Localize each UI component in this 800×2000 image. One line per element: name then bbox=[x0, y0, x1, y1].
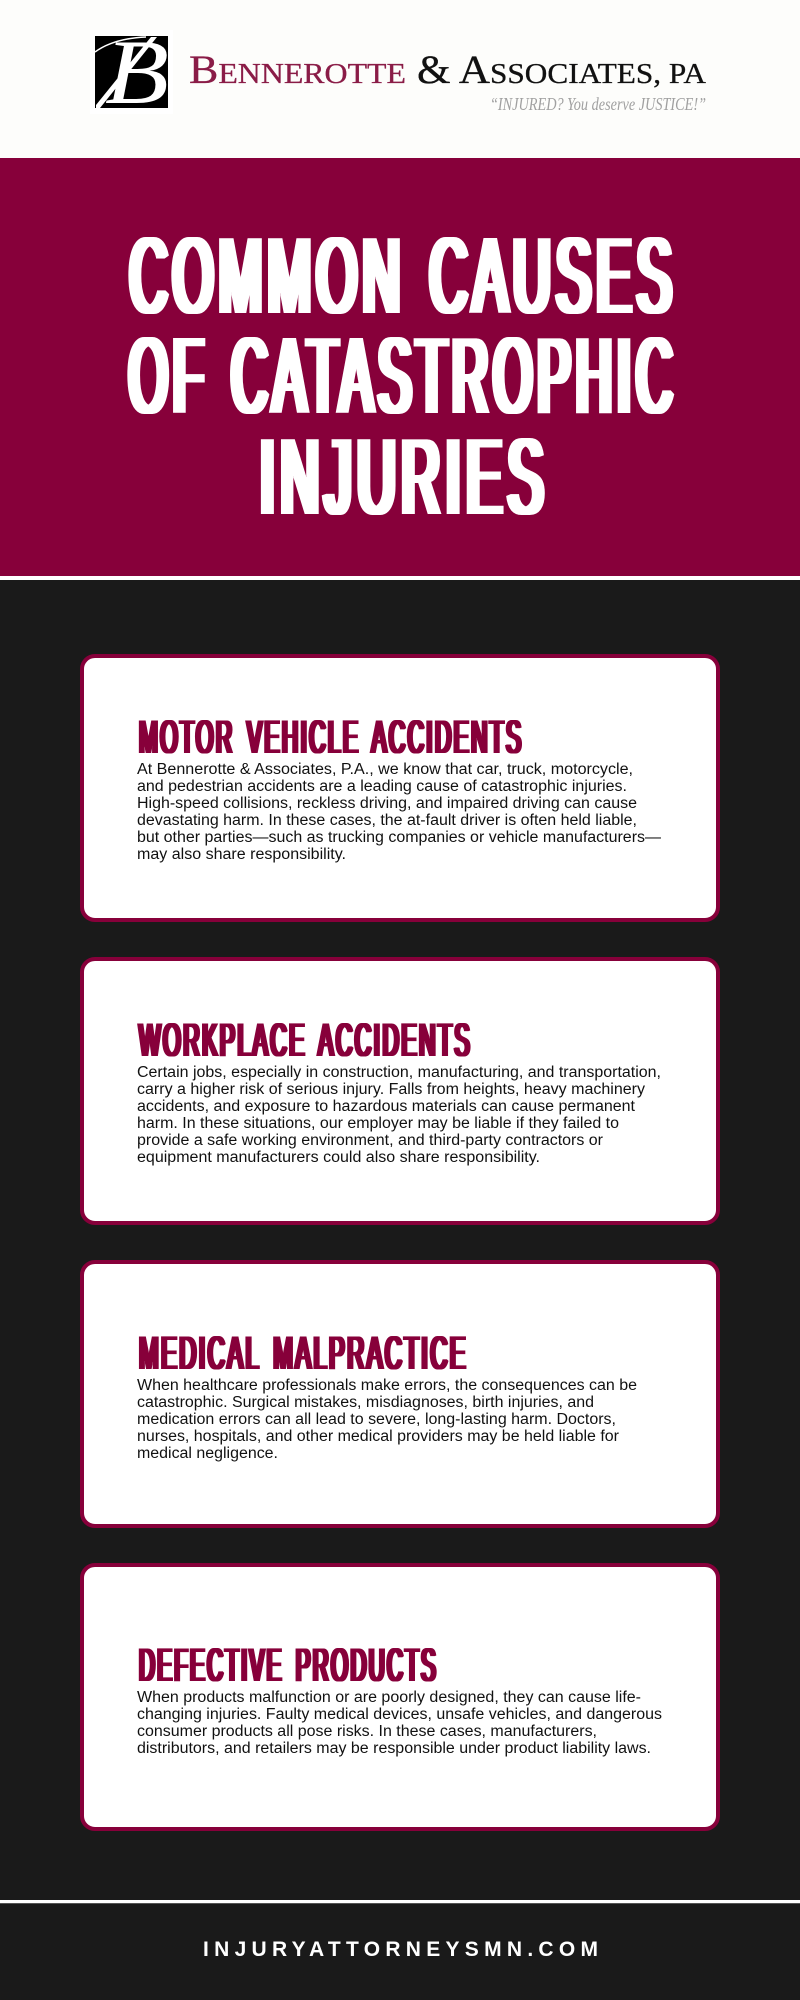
icon: monogram B logo: B bbox=[105, 21, 169, 123]
title text bbox=[129, 215, 678, 538]
logo wordmark: & Associates, PA: & ASSOCIATES, PA bbox=[417, 47, 706, 92]
panel: motor vehicle accidents bbox=[82, 656, 718, 920]
text block: motor vehicle accidents: At Bennerotte & Associates, P.A., we know that car, truck, motorcycle, bbox=[137, 761, 633, 778]
text block: defective products bbox=[137, 1689, 662, 1757]
text block: motor vehicle accidents: devastating harm. In these cases, the at-fault driver is often held liable, bbox=[137, 812, 637, 829]
text block: motor vehicle accidents: but other parties—such as trucking companies or vehicle manufacturers— bbox=[137, 829, 662, 846]
text block: medical malpractice: catastrophic. Surgical mistakes, misdiagnoses, birth injuries, and bbox=[137, 1394, 594, 1411]
text block: defective products: When products malfunction or are poorly designed, they can cause life- bbox=[137, 1689, 641, 1706]
footer url: INJURYATTORNEYSMN.COM bbox=[203, 1938, 598, 1961]
text block: motor vehicle accidents: and pedestrian accidents are a leading cause of catastrophic injuries. bbox=[137, 778, 627, 795]
panel: workplace accidents bbox=[82, 959, 718, 1223]
panel: medical malpractice bbox=[82, 1262, 718, 1526]
panel: defective products: DEFECTIVE PRODUCTS bbox=[139, 1639, 438, 1692]
logo wordmark: Bennerotte: BENNEROTTE bbox=[189, 47, 406, 92]
text block: medical malpractice bbox=[137, 1377, 637, 1462]
text block: motor vehicle accidents: High-speed collisions, reckless driving, and impaired driving can cause bbox=[137, 795, 637, 812]
panel: defective products bbox=[82, 1565, 718, 1829]
icon: monogram B logo bbox=[90, 21, 173, 123]
text block: medical malpractice: medical negligence. bbox=[137, 1445, 278, 1462]
text block: motor vehicle accidents: may also share responsibility. bbox=[137, 846, 346, 863]
text block: workplace accidents: provide a safe working environment, and third-party contractors or bbox=[137, 1132, 603, 1149]
text block: workplace accidents: carry a higher risk of serious injury. Falls from heights, heavy machinery bbox=[137, 1081, 645, 1098]
title banner bbox=[0, 158, 800, 580]
text block: defective products: changing injuries. Faulty medical devices, unsafe vehicles, and dangerous bbox=[137, 1706, 662, 1723]
logo tagline: “INJURED? You deserve JUSTICE!” bbox=[490, 94, 706, 114]
text block: motor vehicle accidents bbox=[137, 761, 662, 863]
text block: medical malpractice: nurses, hospitals, and other medical providers may be held liable for bbox=[137, 1428, 619, 1445]
text block: workplace accidents: equipment manufacturers could also share responsibility. bbox=[137, 1149, 540, 1166]
text block: workplace accidents: Certain jobs, especially in construction, manufacturing, and transportation, bbox=[137, 1064, 661, 1081]
text block: defective products: consumer products all pose risks. In these cases, manufacturers, bbox=[137, 1723, 597, 1740]
footer bbox=[0, 1900, 800, 1961]
panel: medical malpractice: MEDICAL MALPRACTICE bbox=[139, 1327, 468, 1380]
text block: workplace accidents: harm. In these situations, our employer may be liable if they failed to bbox=[137, 1115, 619, 1132]
text block: medical malpractice: When healthcare professionals make errors, the consequences can be bbox=[137, 1377, 637, 1394]
text block: workplace accidents bbox=[137, 1064, 661, 1166]
text block: workplace accidents: accidents, and exposure to hazardous materials can cause permanent bbox=[137, 1098, 636, 1115]
header band with logo bbox=[0, 0, 800, 158]
text block: defective products: distributors, and retailers may be responsible under product liability laws. bbox=[137, 1740, 651, 1757]
text block: medical malpractice: medication errors can all lead to severe, long-lasting harm. Doctors, bbox=[137, 1411, 616, 1428]
